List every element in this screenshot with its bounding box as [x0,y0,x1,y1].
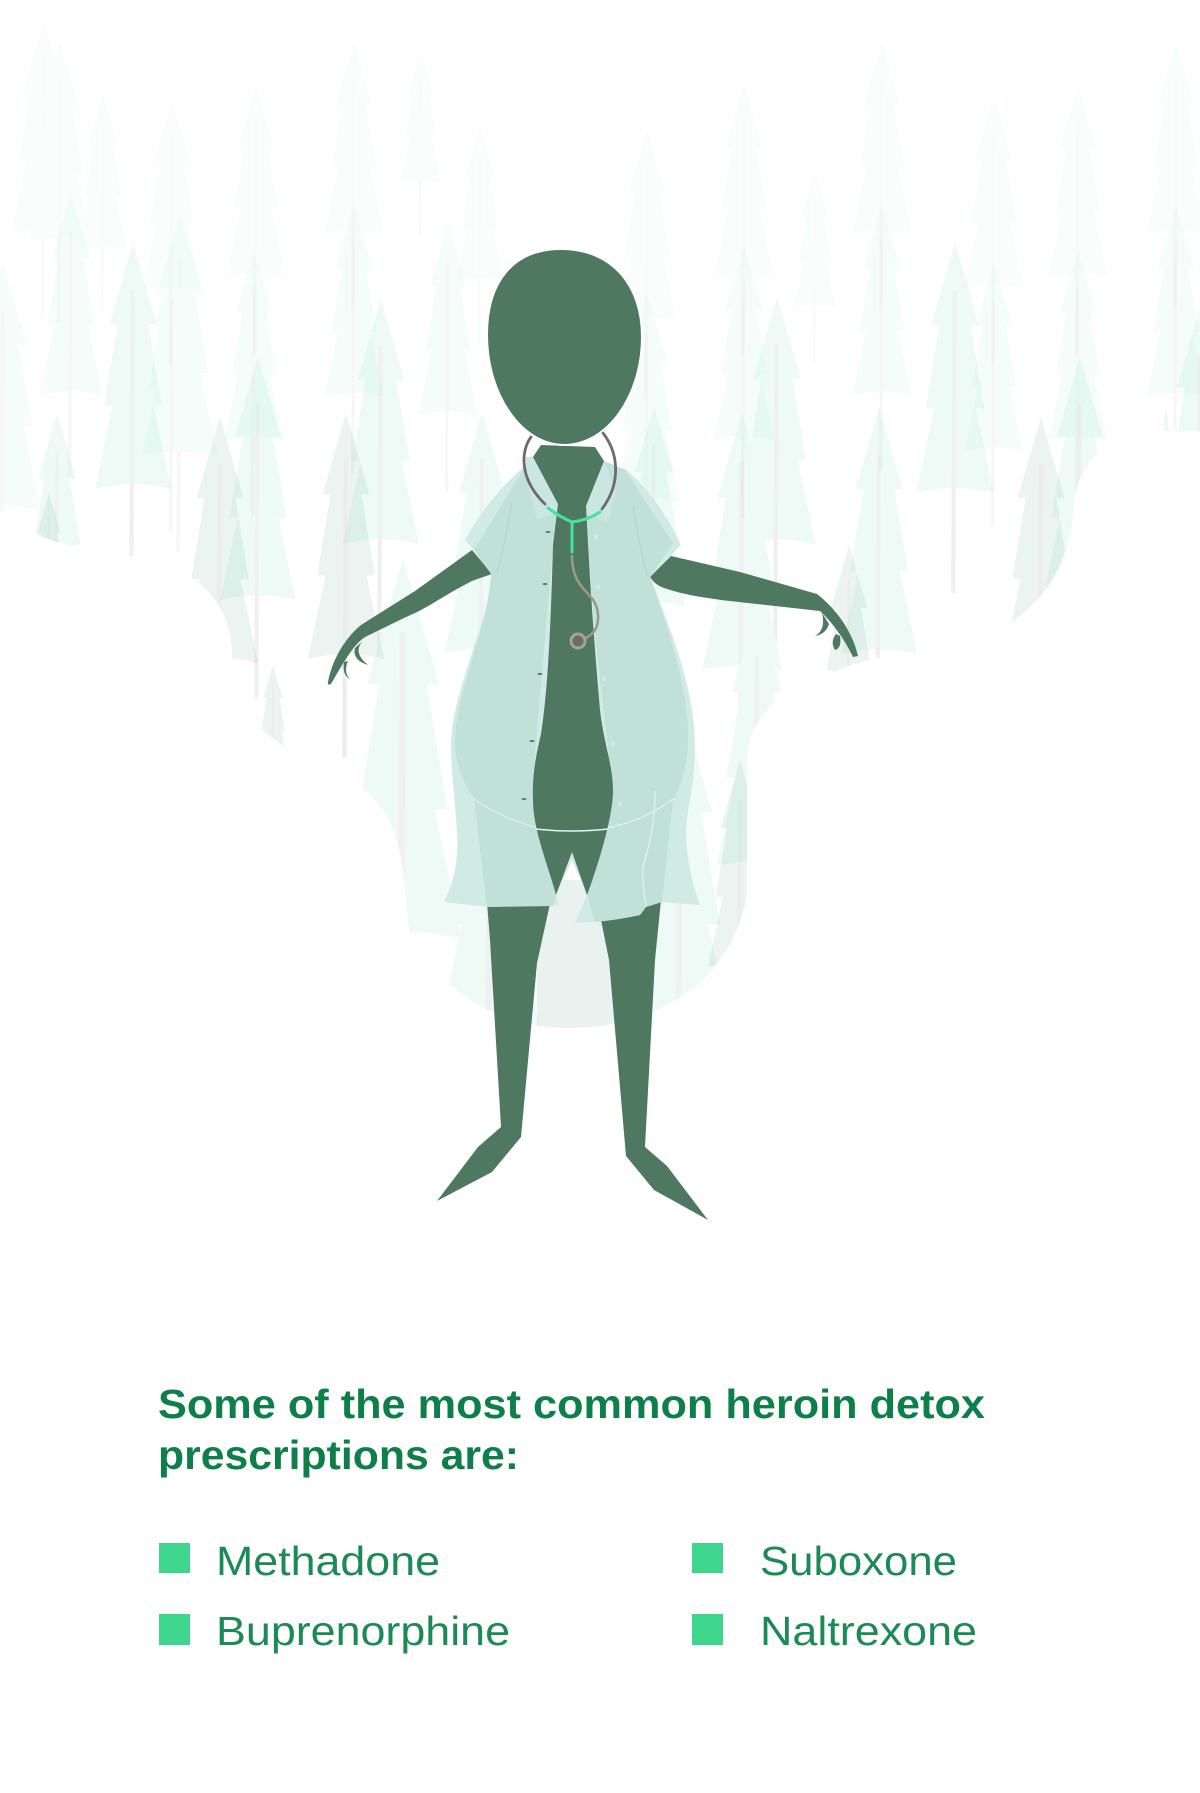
lower tube [572,556,598,640]
green y-tube [548,508,600,552]
heading: prescriptions are: [158,1432,519,1478]
lab coat [444,457,700,923]
coat buttons [522,531,550,800]
torso and neck [533,445,613,895]
coat right panel shade [586,461,688,922]
left collar [526,457,558,520]
heading: Some of the most common heroin detox [158,1381,985,1427]
bullet: Naltrexone [692,1614,723,1645]
coat left panel shade [455,465,558,907]
stethoscope [524,433,616,650]
item: Methadone: Methadone [216,1538,440,1584]
bullet: Buprenorphine [159,1614,190,1645]
waist line [536,829,608,831]
left arm and hand [328,550,492,685]
list: prescriptions [159,1538,977,1654]
tree row: front, grey-green [38,414,1065,967]
item: Naltrexone: Naltrexone [760,1608,977,1654]
item: Buprenorphine: Buprenorphine [216,1608,510,1654]
coat button holes [594,535,622,806]
tree row: near [36,244,1200,1026]
item: Suboxone: Suboxone [760,1538,957,1584]
coat seams [474,502,673,906]
bullet: Suboxone [692,1543,723,1573]
tree row: middle [0,194,1200,510]
forest background [0,192,1200,1028]
right arm and hand [650,556,858,657]
legs and feet [437,890,708,1220]
right collar [586,461,616,522]
tree row: far back [11,20,1200,398]
bullet: Methadone [159,1543,190,1573]
coat outer layer [444,457,700,923]
head [487,249,642,445]
earpiece tubes [524,433,616,509]
chest piece [570,632,586,650]
ground wash between the legs [537,880,614,1028]
heading [158,1381,985,1478]
doctor figure [328,249,858,1220]
